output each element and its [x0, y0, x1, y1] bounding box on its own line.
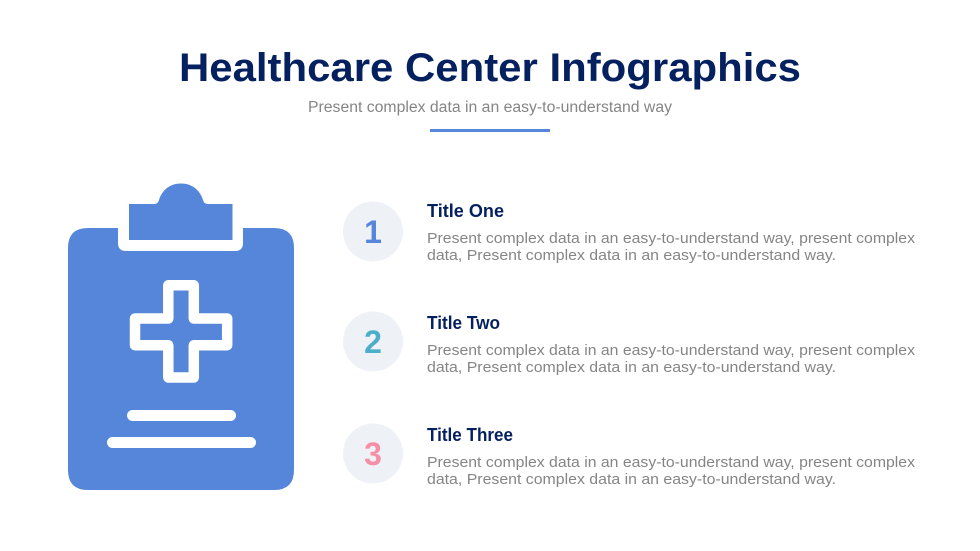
number badge 3 [343, 424, 403, 484]
icon: medical clipboard [68, 184, 294, 490]
item 1 description [427, 230, 916, 264]
number badge 1 [343, 202, 403, 262]
title: Healthcare Center Infographics [179, 46, 801, 90]
item 1 description: data, Present complex data in an easy-to-understand way. [427, 247, 836, 264]
number badge 2 [343, 312, 403, 372]
title underline [430, 129, 550, 132]
item 2 [343, 312, 916, 376]
item 3 [343, 424, 916, 488]
number badge 1: 1 [364, 214, 382, 250]
item 1 [343, 201, 916, 264]
item 2 description: Present complex data in an easy-to-understand way, present complex [427, 342, 916, 359]
item 1 heading: Title One [427, 201, 504, 221]
subtitle: Present complex data in an easy-to-understand way [308, 99, 672, 116]
item 1 description: Present complex data in an easy-to-understand way, present complex [427, 230, 916, 247]
item 2 description [427, 342, 916, 376]
item 3 heading: Title Three [427, 425, 513, 445]
item 2 description: data, Present complex data in an easy-to-understand way. [427, 359, 836, 376]
item 3 description [427, 454, 916, 488]
number badge 3: 3 [364, 436, 382, 472]
number badge 2: 2 [364, 324, 382, 360]
item 3 description: Present complex data in an easy-to-understand way, present complex [427, 454, 916, 471]
item 3 description: data, Present complex data in an easy-to-understand way. [427, 471, 836, 488]
item 2 heading: Title Two [427, 313, 500, 333]
